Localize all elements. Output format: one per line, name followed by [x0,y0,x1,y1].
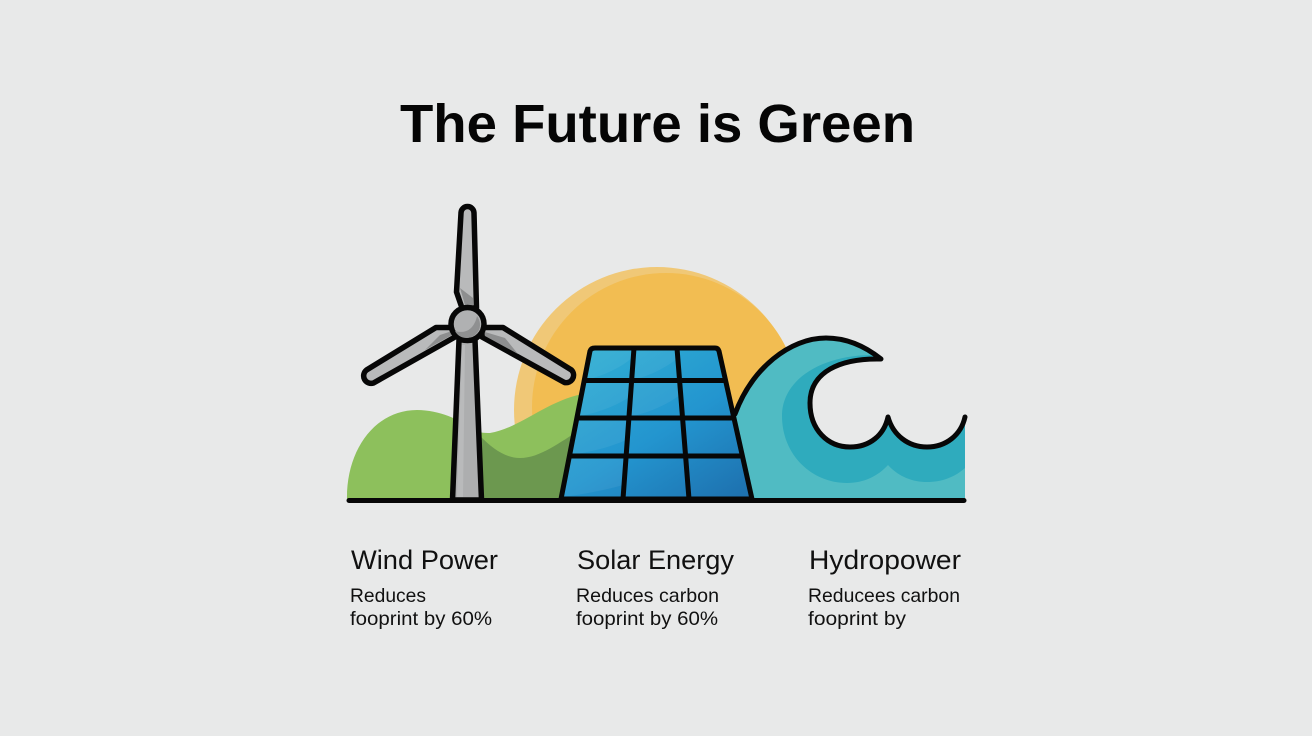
turbine top blade [456,207,476,308]
column: solar energy [576,545,734,630]
description: wind power [350,585,492,630]
description: wind power: Reduces [350,585,426,607]
infographic [346,103,968,629]
heading: solar energy: Solar Energy [577,545,734,575]
ground line [349,498,964,503]
heading: hydropower: Hydropower [809,545,961,575]
illustration: renewable landscape [346,204,968,503]
turbine tower [452,340,482,500]
description: hydropower: Reducees carbon [808,585,960,607]
description: solar energy [576,585,719,630]
column: hydropower [808,545,961,630]
turbine left blade [364,328,455,383]
turbine right blade [482,328,574,383]
icon: green hills [347,394,582,500]
heading: wind power: Wind Power [351,545,498,575]
icon: sun [514,267,786,424]
description: solar energy: Reduces carbon [576,585,719,607]
description: hydropower [808,585,960,630]
turbine hub [451,308,484,340]
title: The Future is Green [400,94,915,154]
description: solar energy: fooprint by 60% [576,608,718,630]
icon: wind turbine [364,207,574,500]
description: wind power: fooprint by 60% [350,608,492,630]
description: hydropower: fooprint by [808,608,906,630]
icon: wave [735,338,965,500]
icon: solar panel [561,348,752,499]
column: wind power [350,545,498,630]
